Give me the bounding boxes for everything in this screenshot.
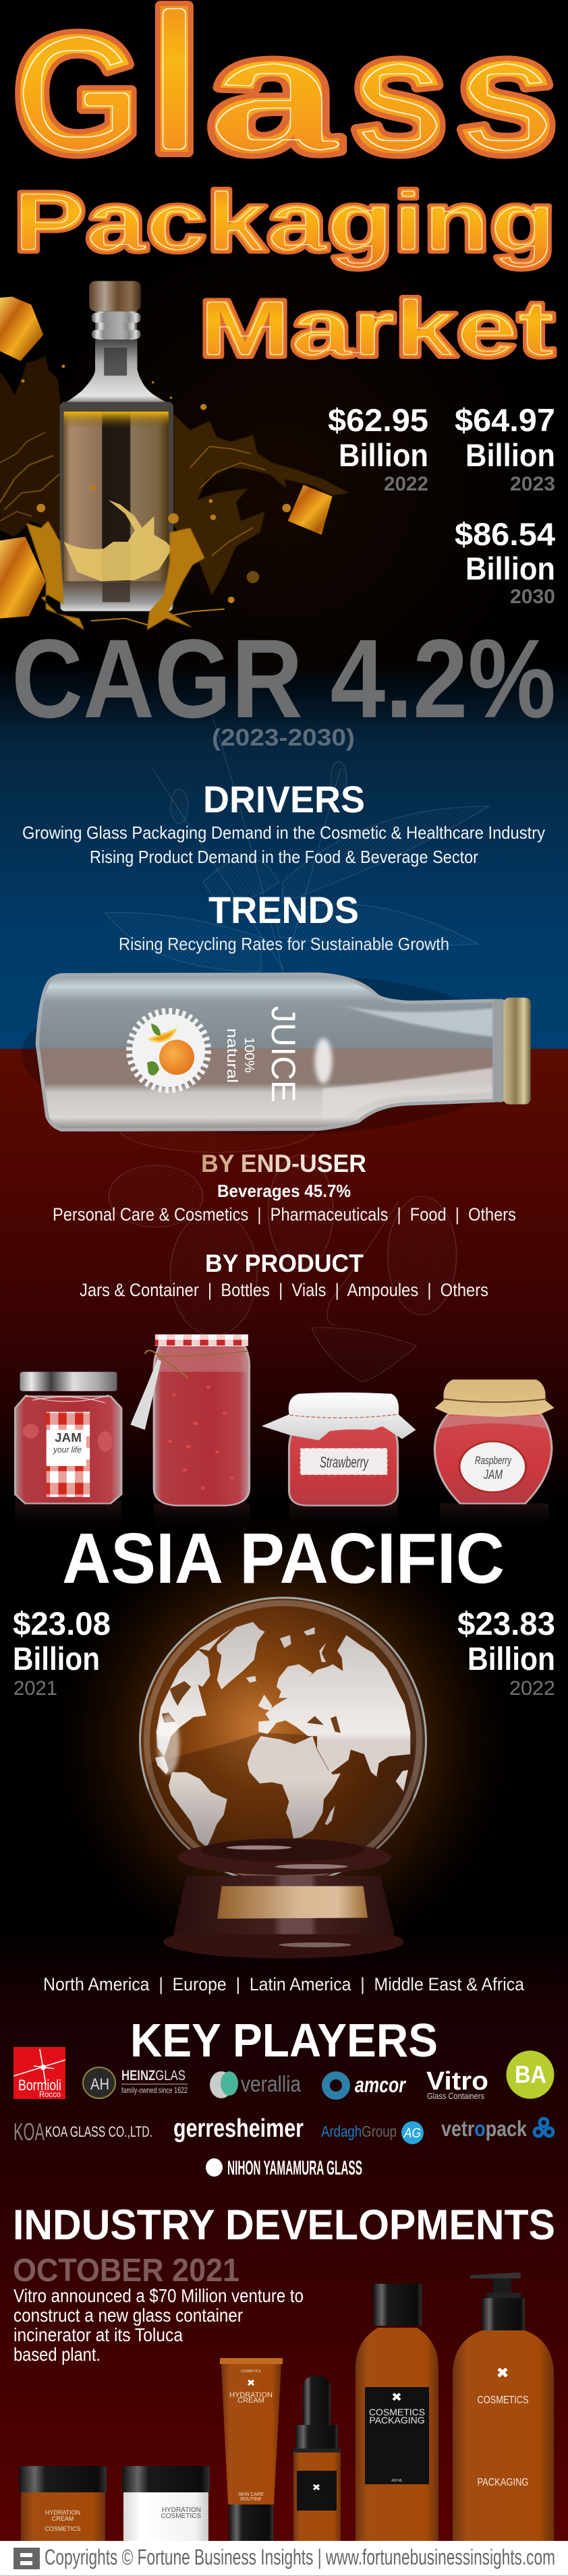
title: Glass: s [350, 0, 447, 188]
product: amber bottle with black label: COSMETICS [369, 2407, 425, 2417]
stat: 2023 market size: $64.97 [455, 402, 555, 438]
illustration: four jam jars [16, 1335, 555, 1534]
label text: natural: natural [224, 1028, 241, 1083]
stat: 2023 market size [455, 402, 555, 495]
drivers list [22, 822, 545, 867]
stat: 2021 region size [13, 1606, 111, 1700]
development date: OCTOBER 2021 [13, 2253, 239, 2289]
stat: 2030 market size: 2030 [510, 586, 555, 608]
logo: Vitro: Glass Containers [427, 2091, 484, 2101]
footer [0, 2541, 568, 2576]
globe glass sphere [140, 1598, 426, 1884]
product: amber jar: COSMETICS [45, 2525, 81, 2532]
stat: 2030 market size [455, 516, 555, 608]
top left ice cube [0, 297, 43, 361]
product heading: BY PRODUCT [205, 1250, 364, 1277]
product: dropper bottle [293, 2376, 341, 2541]
development description: construct a new glass container [13, 2305, 243, 2326]
product: tube: CREAM [237, 2397, 264, 2405]
logo: Koa Glass [13, 2118, 152, 2146]
logo: Amcor [326, 2073, 406, 2097]
logo: Vetropack: vetropack [441, 2117, 527, 2141]
other regions: North America | Europe | Latin America | Middle East & Africa [43, 1974, 525, 1994]
logo: Ardagh Group: ArdaghGroup [321, 2123, 397, 2140]
logo: BA: BA [515, 2061, 546, 2088]
label text: JUICE: JUICE [264, 1006, 302, 1102]
right splash mass [173, 414, 349, 595]
logo: Ardagh Group: AG [403, 2126, 421, 2141]
drivers list: Rising Product Demand in the Food & Beverage Sector [90, 847, 478, 867]
product: amber pump bottle: COSMETICS [478, 2395, 529, 2406]
wooden base [163, 1839, 404, 1959]
logo: Bormioli Rocco: Bormioli [18, 2077, 61, 2094]
trends heading: TRENDS [208, 889, 359, 931]
brass plaque [217, 1886, 368, 1919]
logo: Nihon Yamamura Glass: NIHON YAMAMURA GLASS [227, 2157, 362, 2179]
golden splash trailing under bottle [92, 609, 224, 625]
stat: 2022 market size: 2022 [384, 473, 428, 495]
bottle shadow [22, 973, 529, 1135]
bottle body frame [60, 402, 173, 611]
illustration: juice bottle on its side [22, 973, 531, 1135]
bottle neck and shoulder [60, 339, 172, 405]
golden splash right of bottle [147, 528, 204, 630]
development description: incinerator at its Toluca [13, 2324, 183, 2345]
CAGR period: (2023-2030) [212, 725, 355, 751]
jar: hexagonal with steel lid [16, 1372, 121, 1534]
bottle neck rings [95, 311, 137, 339]
product: white jar: HYDRATION [162, 2507, 201, 2514]
product: amber bottle with black label [356, 2284, 438, 2541]
logo: Heinz Glas: family-owned since 1622 [121, 2085, 188, 2095]
liquid splash inside bottle [64, 500, 172, 581]
jar: raspberry with burlap cloth [434, 1380, 555, 1530]
logo: Heinz Glas: AH [90, 2075, 109, 2094]
end-user heading: BY END-USER [201, 1150, 366, 1177]
splash droplets [21, 365, 291, 603]
title: Market: Market [199, 283, 555, 374]
bottle stopper [89, 281, 141, 311]
product: tube: HYDRATION [229, 2391, 273, 2399]
development description: Vitro announced a $70 Million venture to [13, 2285, 304, 2306]
product: amber pump bottle [453, 2272, 554, 2541]
logo: Heinz Glas: HEINZGLAS [121, 2068, 186, 2083]
end-user segments: Personal Care & Cosmetics | Pharmaceuticals | Food | Others [53, 1204, 516, 1225]
stat: 2023 market size: Billion [465, 437, 555, 473]
development description: based plant. [13, 2344, 101, 2365]
golden splash left of bottle [26, 521, 84, 630]
upper highlight [333, 1003, 492, 1037]
product: amber bottle with black label: 400 ML [391, 2479, 403, 2483]
illustration: snow globe with world map [140, 1598, 426, 1959]
bottle body [37, 974, 494, 1129]
jar: raspberry with burlap cloth: Raspberry [475, 1454, 512, 1467]
stat: 2022 market size [328, 402, 428, 495]
label seal [130, 1011, 208, 1090]
logo: Ardagh Group [321, 2121, 424, 2144]
key players heading: KEY PLAYERS [130, 2014, 438, 2067]
footer background [0, 2541, 568, 2576]
left splash highlights [0, 432, 59, 521]
label fruit [147, 1024, 194, 1075]
globe glare [158, 1714, 179, 1774]
right ice cube [288, 485, 333, 535]
drivers heading: DRIVERS [203, 778, 365, 820]
illustration: whisky bottle with golden splash and ice [0, 281, 349, 630]
stat: 2030 market size: Billion [465, 551, 555, 586]
product: amber jar [19, 2466, 107, 2541]
stat: 2022 region size: Billion [467, 1642, 555, 1677]
lower highlight [322, 1068, 492, 1119]
illustration: amber cosmetic packaging [19, 2272, 554, 2541]
jar: strawberry with white cloth [262, 1393, 416, 1530]
right splash highlights [190, 447, 265, 556]
bottle liquid [64, 412, 169, 581]
gold cap [503, 998, 531, 1104]
logo: Amcor: amcor [355, 2073, 406, 2097]
product: tube [220, 2358, 283, 2541]
logo: Bormioli Rocco: Rocco [39, 2090, 61, 2099]
stat: 2022 region size [457, 1606, 555, 1700]
product: white jar: COSMETICS [161, 2513, 201, 2520]
stat: 2021 region size: Billion [13, 1642, 100, 1677]
product: amber bottle with black label: PACKAGING [369, 2415, 425, 2426]
jar: tall with checked lid and tag [130, 1335, 250, 1532]
neck ring [493, 999, 505, 1102]
stat: 2023 market size: 2023 [510, 473, 555, 495]
product: tube: ROUTINE [240, 2497, 262, 2502]
product: white jar [122, 2466, 210, 2541]
title: Glass: s [456, 0, 557, 188]
left splash mass [0, 356, 60, 537]
product: amber pump bottle: PACKAGING [478, 2477, 529, 2488]
bottle base glass [61, 581, 173, 611]
continents [155, 1622, 410, 1847]
logos: key players [13, 2047, 555, 2179]
logo: BA [506, 2050, 555, 2099]
product: amber jar: HYDRATION [45, 2509, 80, 2516]
background engraving: hops over red panel [109, 1106, 457, 1382]
bottle neck dark core [104, 347, 127, 376]
stat: 2022 market size: $62.95 [328, 402, 428, 438]
logo: Vitro: Vitro [426, 2067, 488, 2096]
logo: Gerresheimer: gerresheimer [173, 2115, 304, 2143]
end-user leading segment: Beverages 45.7% [217, 1181, 351, 1201]
title: Glass: G [13, 0, 142, 188]
lower left ice cube [0, 536, 46, 619]
stat: 2022 region size: 2022 [509, 1677, 555, 1700]
region heading: ASIA PACIFIC [62, 1519, 505, 1598]
logo: Verallia [210, 2071, 302, 2098]
logo: Koa Glass: KOA GLASS CO.,LTD. [45, 2123, 152, 2140]
jar: raspberry with burlap cloth: JAM [483, 1468, 503, 1482]
label text: 100%: 100% [242, 1037, 256, 1073]
jar: hexagonal with steel lid: JAM [55, 1431, 82, 1445]
stat: 2021 region size: $23.08 [13, 1606, 111, 1642]
glass shine [315, 1038, 332, 1084]
product: tube: COSMETICS [241, 2370, 262, 2374]
logo: Verallia: verallia [241, 2071, 302, 2096]
product: tube: SKIN CARE [238, 2492, 264, 2497]
globe rim light [147, 1603, 420, 1878]
product segments: Jars & Container | Bottles | Vials | Ampoules | Others [80, 1280, 488, 1300]
title: Packaging: Packaging [13, 174, 556, 269]
stat: 2022 market size: Billion [339, 437, 428, 473]
development description [13, 2285, 304, 2365]
logo: Koa Glass: KOA [13, 2118, 45, 2146]
background engraving: wheat over blue panel [105, 720, 489, 985]
logo: Bormioli Rocco [13, 2047, 65, 2099]
jar: hexagonal with steel lid: your life [53, 1445, 82, 1455]
stat: 2030 market size: $86.54 [455, 516, 555, 552]
trends text: Rising Recycling Rates for Sustainable Growth [119, 934, 449, 954]
logo: Heinz Glas [83, 2067, 188, 2098]
product: amber jar: CREAM [52, 2515, 74, 2522]
stat: 2022 region size: $23.83 [457, 1606, 555, 1642]
jar: strawberry with white cloth: Strawberry [320, 1453, 369, 1471]
stat: 2021 region size: 2021 [13, 1677, 57, 1700]
logo: Nihon Yamamura Glass [206, 2157, 362, 2179]
title: Glass: a [208, 0, 340, 188]
globe lower shade [148, 1733, 414, 1855]
footer logo [13, 2548, 40, 2569]
